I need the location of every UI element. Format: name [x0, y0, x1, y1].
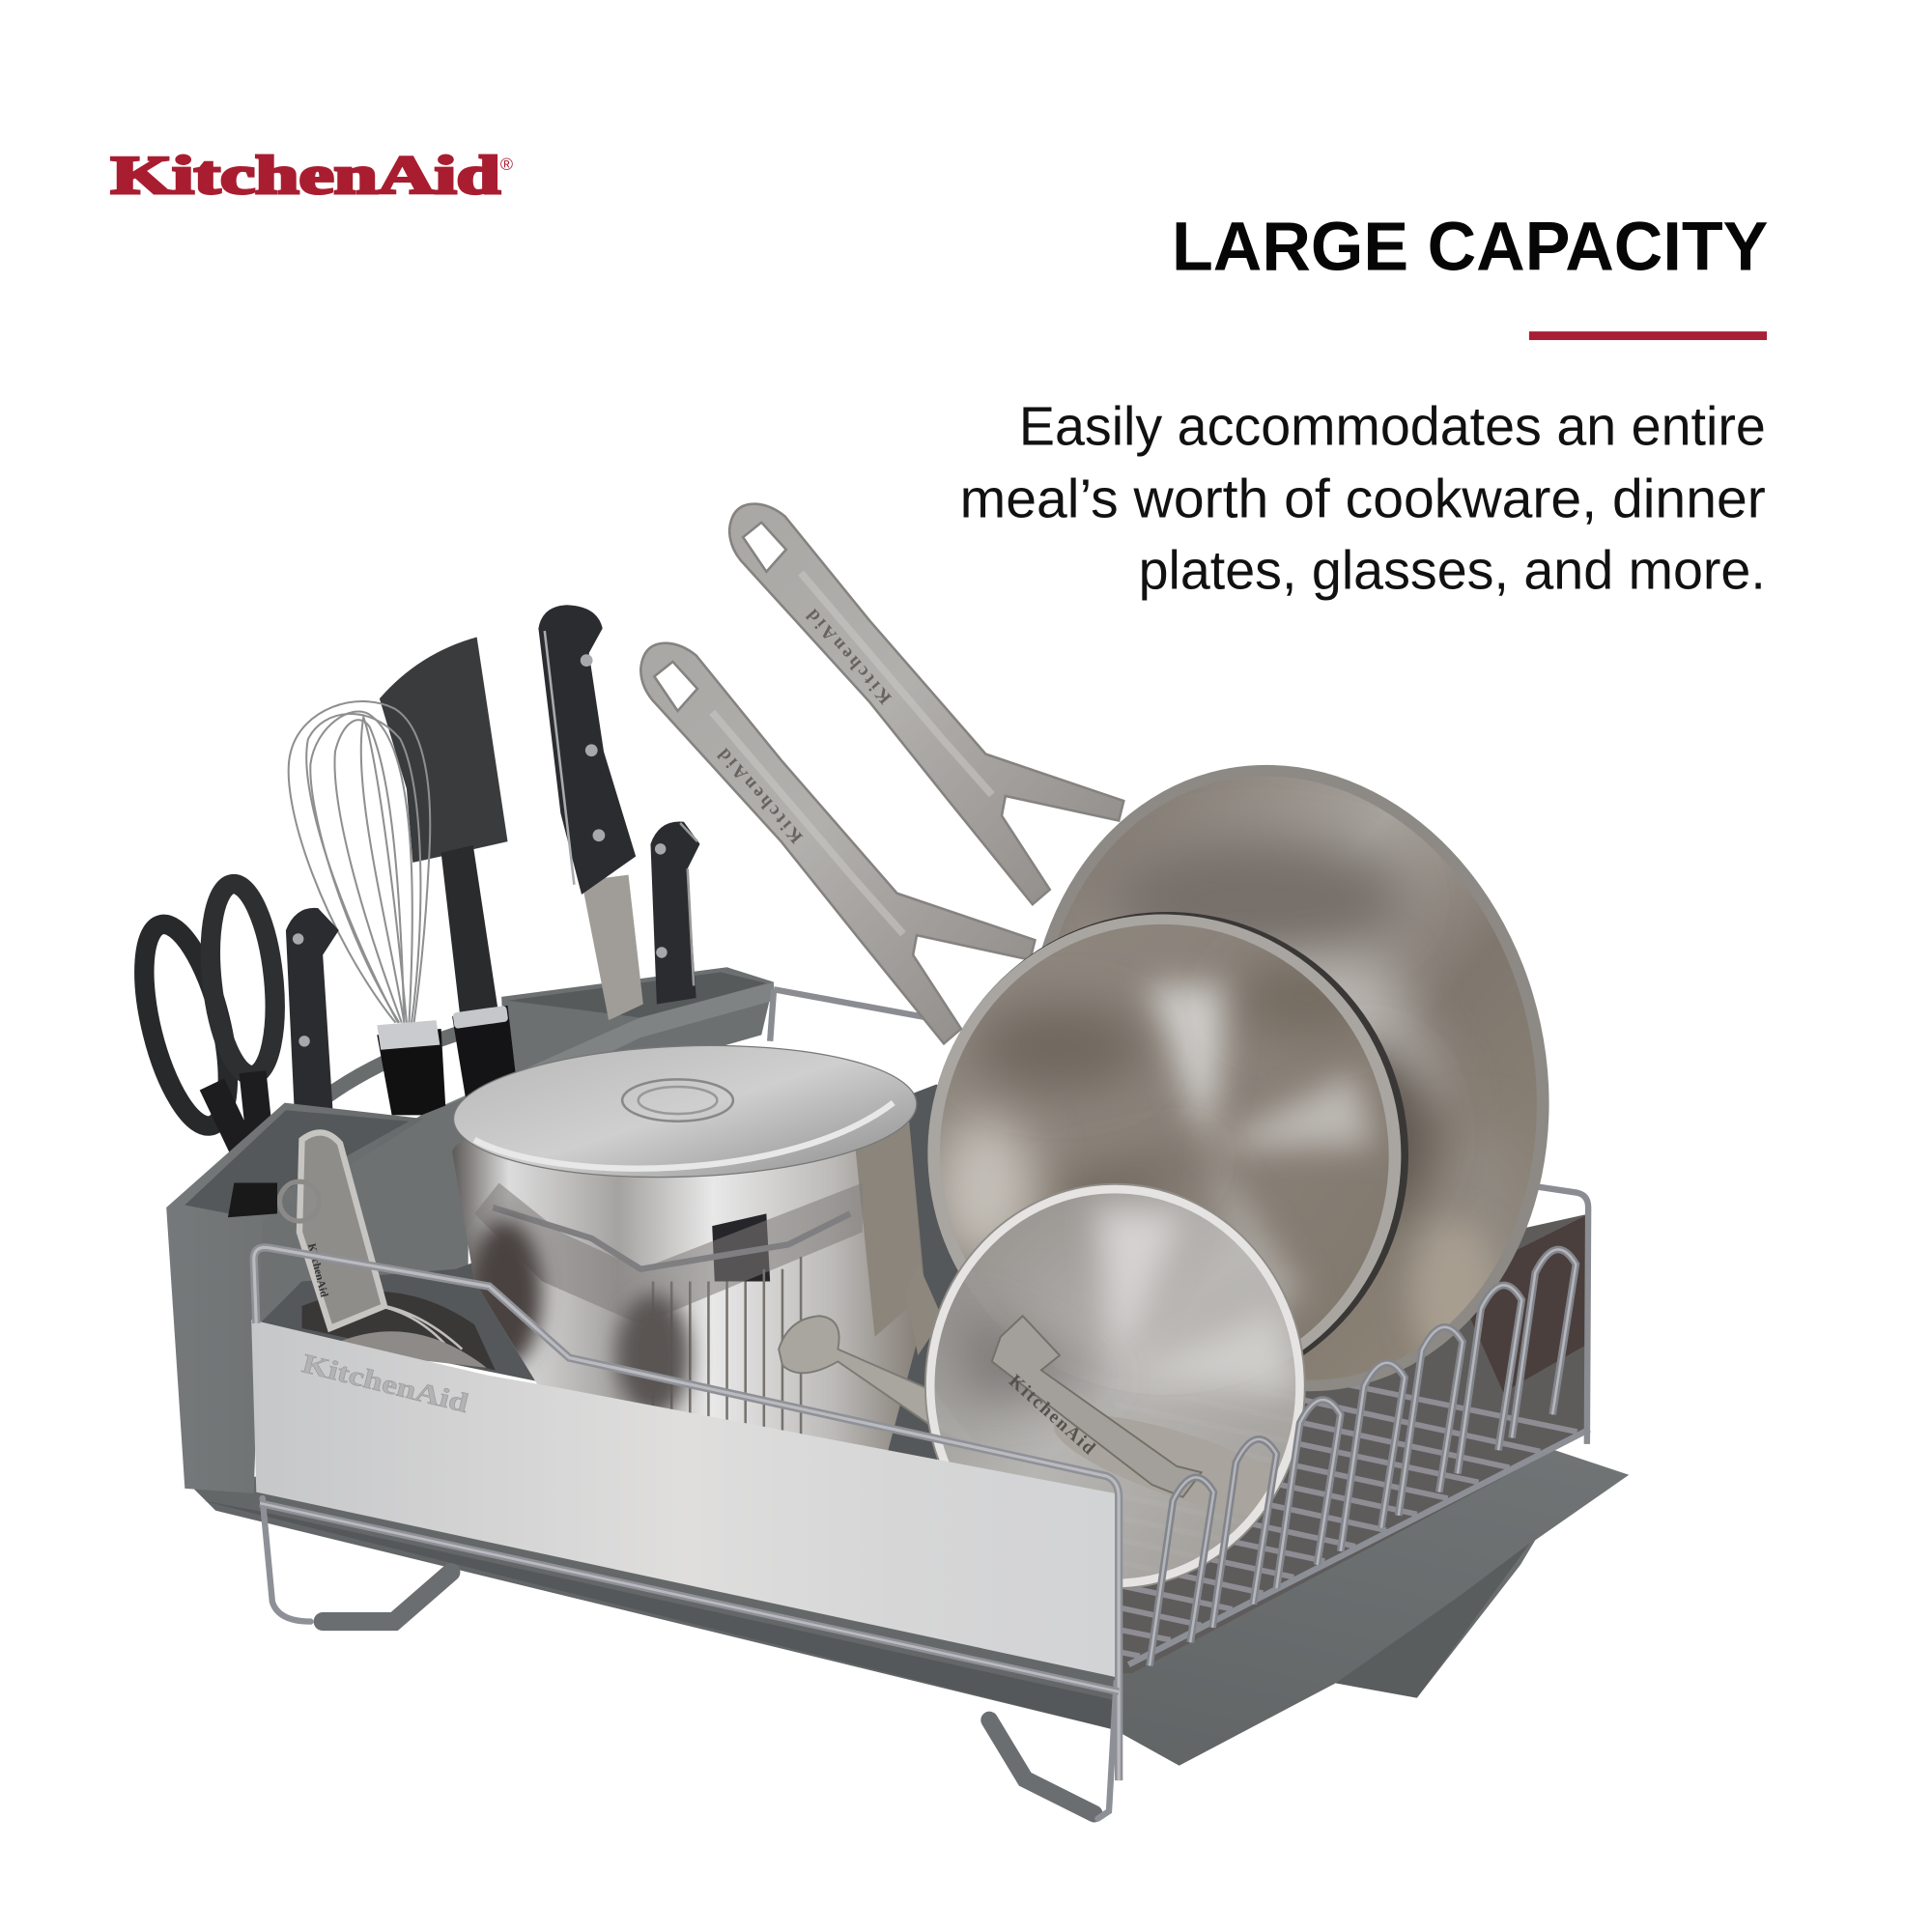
measuring spoons and cups: KitchenAid [305, 1242, 329, 1299]
utensil: whisk [289, 701, 446, 1115]
logo: KitchenAid [111, 146, 513, 206]
front wire frame [254, 1247, 1119, 1780]
front steel panel [251, 1320, 1115, 1677]
utensil: spatula [380, 637, 518, 1099]
cooking pot [451, 1038, 926, 1454]
utensil: scissors [128, 881, 283, 1220]
pan: large back skillet [1041, 765, 1549, 1391]
feet: rubber legs [263, 1498, 1117, 1819]
logo: KitchenAid: KitchenAid [111, 146, 500, 206]
pan handle: back pan [729, 504, 1123, 904]
glass lid with handle: KitchenAid [1005, 1371, 1099, 1459]
measuring spoons and cups [280, 1132, 496, 1370]
pot handle [779, 1263, 974, 1441]
rack interior backdrop [259, 1084, 1115, 1497]
pan: medium front skillet [927, 912, 1408, 1355]
back rail of rack [770, 989, 1588, 1444]
tray: drip tray [193, 1433, 1629, 1766]
utensil: small right knife [650, 822, 699, 1005]
front wire arches [1150, 1249, 1576, 1665]
rack floor with wires [1115, 1213, 1589, 1673]
body text [960, 395, 1766, 601]
glass lid with handle [925, 1184, 1321, 1588]
pan handle: back pan: KitchenAid [803, 605, 895, 707]
body text: plates, glasses, and more. [1139, 540, 1766, 601]
logo: KitchenAid: ® [500, 155, 513, 174]
body text: meal’s worth of cookware, dinner [960, 469, 1766, 529]
red divider rule [1529, 331, 1767, 340]
pan handle: front pan: KitchenAid [714, 744, 807, 847]
front steel panel: KitchenAid [299, 1349, 471, 1419]
utensil: small left knife [286, 908, 339, 1140]
body text: Easily accommodates an entire [1019, 395, 1766, 456]
product photo illustration: dish rack [128, 504, 1629, 1819]
left caddy compartment [166, 1096, 469, 1493]
pan handle: front pan [640, 643, 1035, 1043]
rear caddy compartment [327, 967, 774, 1140]
title: LARGE CAPACITY [1172, 208, 1768, 285]
utensil: large knife [538, 605, 643, 1020]
